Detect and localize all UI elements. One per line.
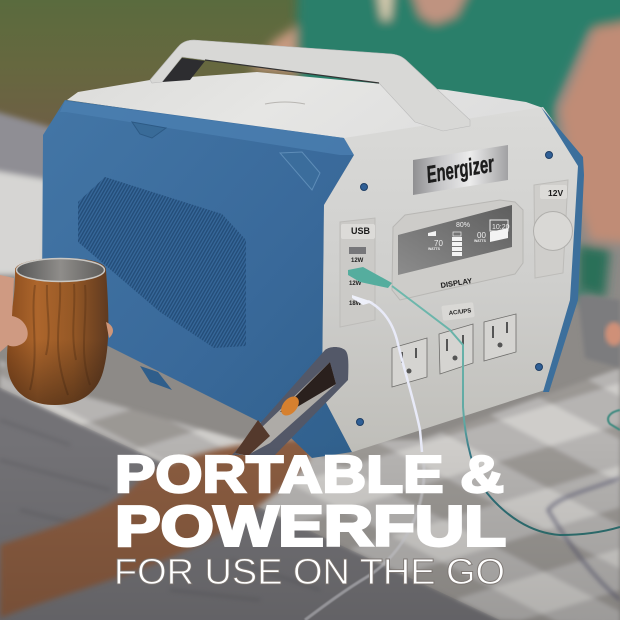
display surround bbox=[392, 200, 523, 300]
display screen: 80% bbox=[456, 222, 470, 229]
faint white cable bbox=[305, 455, 424, 620]
blurred wire bbox=[548, 478, 620, 600]
display screen: WATTS bbox=[428, 247, 441, 251]
hand on mug bbox=[0, 275, 113, 352]
FOR USE ON THE GO: FOR USE ON THE GO bbox=[114, 551, 505, 592]
AC outlets bbox=[392, 314, 516, 387]
display screen: 10:20 bbox=[492, 224, 510, 231]
12V port bbox=[534, 180, 572, 278]
blue top strip bbox=[60, 101, 354, 155]
USB panel: 12W bbox=[351, 258, 364, 264]
AC/UPS label bbox=[441, 302, 475, 321]
bottom shading bbox=[0, 440, 620, 620]
display screen: 70 bbox=[434, 239, 443, 248]
top face bbox=[67, 72, 543, 140]
plaid tablecloth bbox=[0, 360, 620, 620]
teal cable bbox=[348, 267, 620, 535]
corner notches bbox=[280, 152, 320, 190]
Energizer plate: Energizer bbox=[424, 150, 497, 189]
power station bbox=[42, 40, 620, 535]
blue side panel bbox=[42, 100, 354, 458]
12V port: 12V bbox=[548, 188, 563, 198]
white cable bbox=[352, 295, 422, 452]
screw holes bbox=[356, 152, 552, 426]
USB panel bbox=[340, 218, 375, 327]
right table edge bbox=[578, 295, 620, 368]
mug bbox=[7, 258, 108, 405]
PORTABLE &: PORTABLE & bbox=[115, 446, 504, 504]
wooden table bbox=[0, 385, 500, 620]
arm and hand bbox=[0, 439, 313, 618]
display screen: WATTS bbox=[474, 239, 487, 243]
AC/UPS label: AC/UPS bbox=[449, 308, 472, 317]
USB panel: USB bbox=[351, 226, 371, 236]
front panel bbox=[322, 107, 579, 452]
top button recess bbox=[265, 102, 305, 104]
USB panel: 18W bbox=[349, 301, 362, 307]
display screen: 00 bbox=[477, 231, 486, 240]
display screen bbox=[398, 205, 512, 275]
speaker grille bbox=[78, 177, 246, 348]
right blue trim bbox=[541, 107, 584, 392]
blurred foliage bbox=[0, 0, 320, 130]
handle bbox=[150, 40, 470, 131]
phone bbox=[232, 347, 348, 456]
woman in green shirt bbox=[250, 0, 620, 300]
headline bbox=[114, 446, 506, 592]
DISPLAY label: DISPLAY bbox=[440, 276, 473, 290]
USB panel: 12W bbox=[349, 281, 362, 287]
Energizer plate bbox=[413, 145, 508, 195]
left table corner bbox=[0, 110, 60, 275]
POWERFUL: POWERFUL bbox=[115, 494, 506, 558]
